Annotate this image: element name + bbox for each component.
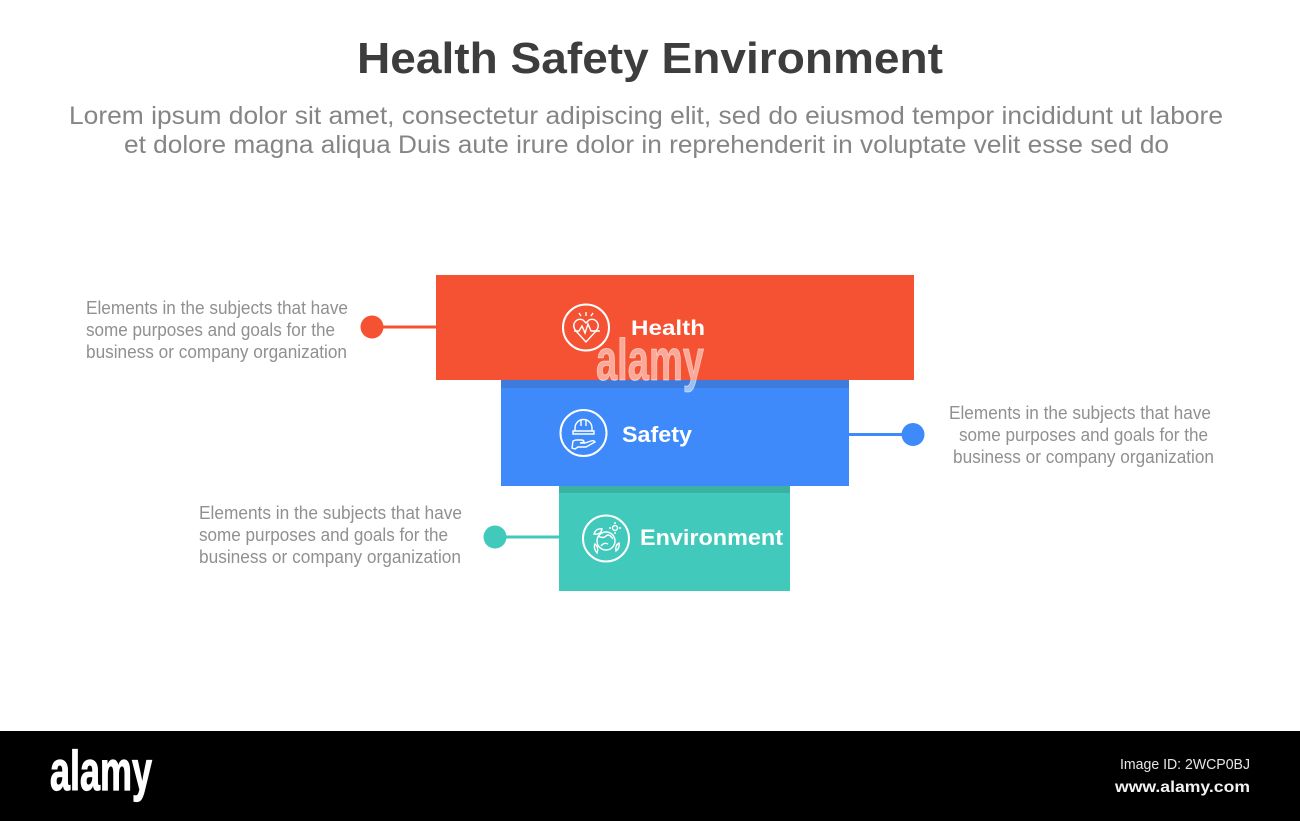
subtitle text: Lorem ipsum dolor sit amet, consectetur adipiscing elit, sed do eiusmod tempor incididunt ut labore [69,102,1223,130]
icon: helmet in hand [560,410,606,456]
text block: environment description: Elements in the subjects that have [199,503,462,523]
text block: health description [86,298,348,362]
title: Health Safety Environment [357,34,943,83]
icon: environment globe [583,516,629,562]
label: environment: Environment [640,525,784,550]
label: safety: Safety [622,422,693,447]
text block: health description: Elements in the subjects that have [86,298,348,318]
icon: heart with pulse [563,304,609,350]
panel: environment [559,486,790,591]
text block: safety description: business or company organization [953,447,1214,467]
image id: Image ID: 2WCP0BJ [1120,756,1250,773]
connector: environment [484,526,559,548]
text block: environment description: some purposes and goals for the [199,525,448,545]
text block: health description: business or company organization [86,342,347,362]
panel: safety [501,380,849,486]
website: www.alamy.com [1114,779,1250,796]
footer logo: alamy [50,739,152,802]
text block: safety description: Elements in the subjects that have [949,403,1211,423]
watermark: alamy [596,328,704,393]
text block: health description: some purposes and goals for the [86,320,335,340]
connector: safety [849,423,924,446]
footer bar [0,731,1300,821]
label: health: Health [631,317,705,340]
connector: health [360,316,436,338]
subtitle text: et dolore magna aliqua Duis aute irure dolor in reprehenderit in voluptate velit esse sed do [124,131,1169,159]
panel: health [436,275,914,380]
text block: safety description: some purposes and goals for the [959,425,1208,445]
text block: environment description: business or company organization [199,547,461,567]
text block: safety description [949,403,1214,467]
subtitle text [69,102,1223,159]
text block: environment description [199,503,462,567]
